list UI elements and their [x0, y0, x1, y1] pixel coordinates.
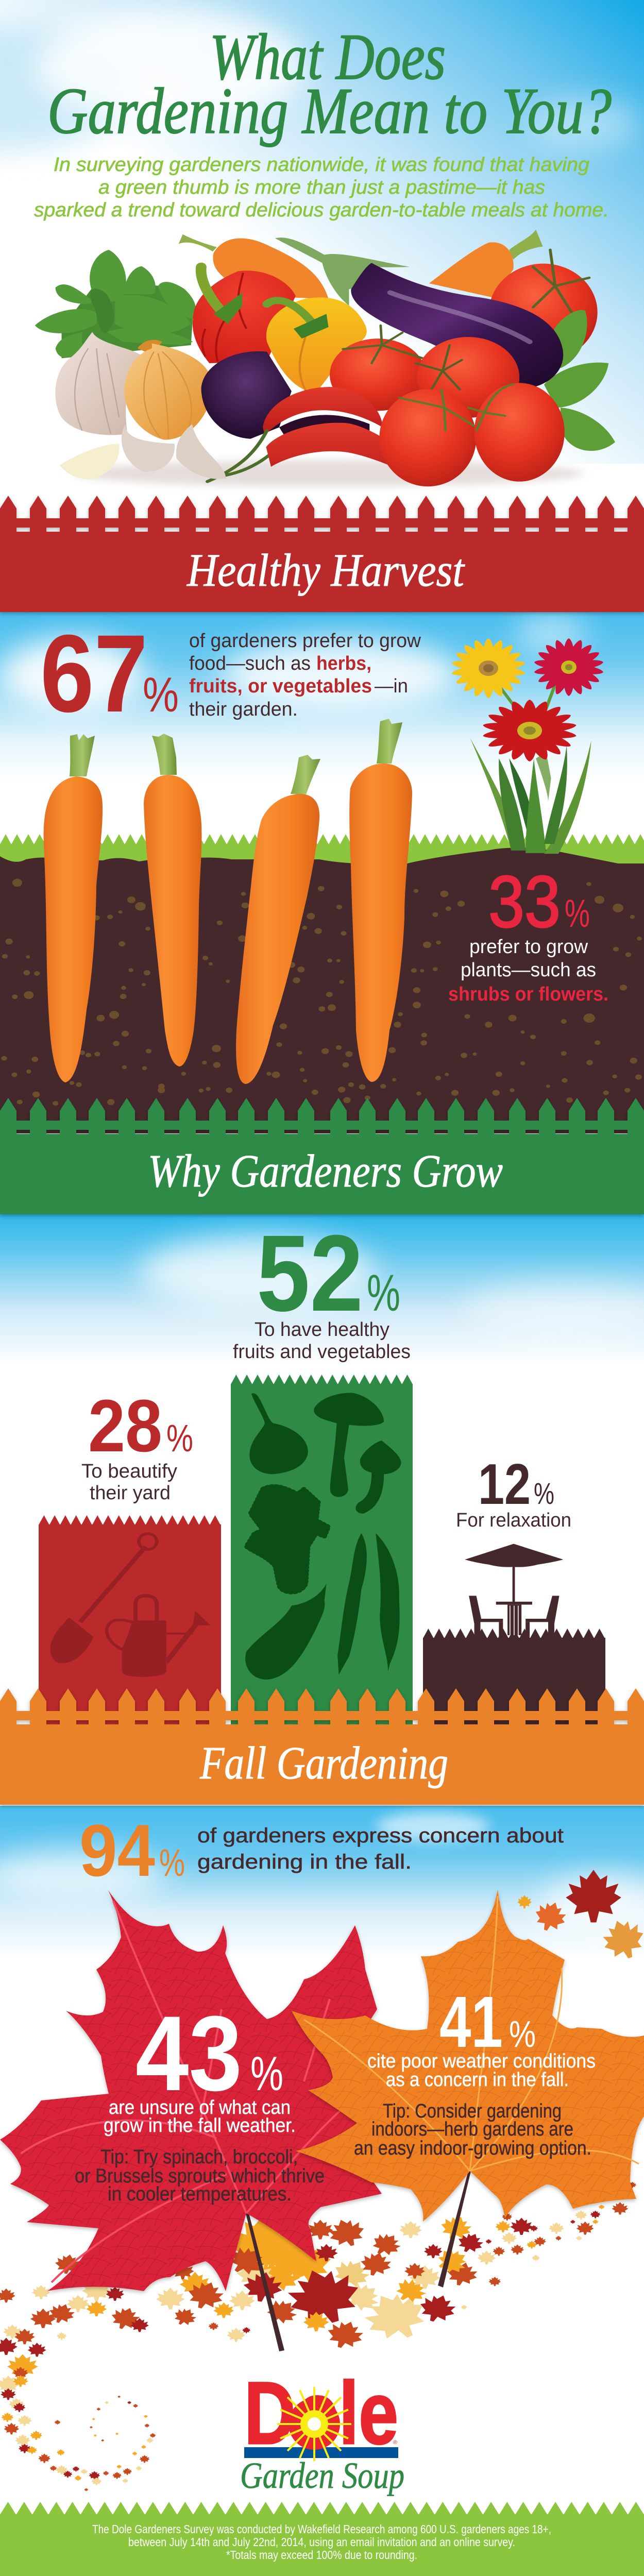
- icon: carrot 4: [349, 719, 412, 1082]
- stat: 67 percent: %: [143, 668, 179, 722]
- icon: garlic bulb: [55, 332, 144, 435]
- icon: tomato middle: [416, 337, 519, 418]
- stat: 43 percent: 43: [135, 1994, 242, 2113]
- tip text: indoor herbs: Tip: Consider gardening: [383, 2100, 562, 2122]
- icon: chili stems: [207, 431, 269, 482]
- stat: 12 percent: For relaxation: [456, 1510, 571, 1531]
- stat: 41 percent: [354, 1981, 596, 2159]
- icon: carrot 1: [44, 734, 103, 1082]
- sky: fall gardening: [0, 1806, 644, 1976]
- grass strip: [0, 834, 644, 870]
- stat text: food: herbs,: [316, 653, 371, 674]
- stat: 41 percent: %: [509, 2014, 536, 2055]
- leaf stem: red leaf: [245, 2211, 284, 2351]
- icon: carrot 3: [236, 755, 320, 1084]
- icon: left carrot: [179, 234, 329, 299]
- stat text: food: food—such as: [189, 653, 311, 674]
- icon: tomato front left: [379, 389, 477, 486]
- stat: 52 percent: 52: [257, 1212, 363, 1334]
- tip text: cool weather crops: [75, 2146, 325, 2205]
- stat text: plants: [448, 936, 608, 1005]
- stat: 52 percent: To have healthy: [255, 1319, 389, 1341]
- footer text: survey methodology: *Totals may exceed 100% due to rounding.: [226, 2548, 417, 2562]
- large orange maple leaf: [292, 1889, 644, 2287]
- stat text: food: [189, 630, 421, 720]
- icon: small eggplant: [201, 351, 292, 439]
- fence: red band: [0, 496, 644, 612]
- heading: why gardeners grow: Why Gardeners Grow: [148, 1146, 503, 1197]
- intro text: In surveying gardeners nationwide, it was found that having: [54, 154, 589, 176]
- icon: red chili bottom: [266, 423, 438, 484]
- heading: fall gardening: Fall Gardening: [199, 1738, 448, 1789]
- stat: 67 percent: 67: [40, 612, 148, 735]
- footer: [0, 2502, 644, 2576]
- fence: orange band: [0, 1688, 644, 1805]
- leaf texture and veins: orange: [292, 1889, 644, 2222]
- icon: tomato left: [330, 326, 426, 411]
- stat: 12 percent: %: [534, 1477, 554, 1511]
- sky: healthy harvest: [0, 612, 644, 849]
- silhouettes: garlic, mushrooms, lettuce, eggplant, beans: [245, 1393, 401, 1680]
- icon: red chili top: [263, 387, 383, 435]
- stat text: food: fruits, or vegetables: [189, 675, 372, 697]
- flower: yellow: [451, 638, 526, 698]
- icon: tomato front right: [468, 383, 565, 482]
- leaf body: orange: [292, 1889, 644, 2222]
- stat text: plants: plants—such as: [461, 959, 596, 981]
- tip text: indoor herbs: [354, 2100, 591, 2159]
- stat: 28 percent: their yard: [90, 1482, 171, 1504]
- stat text: weather: [367, 2050, 596, 2091]
- stat text: weather: as a concern in the fall.: [386, 2069, 569, 2091]
- stat: 41 percent: 41: [439, 1981, 503, 2062]
- soil speckles: [1, 879, 642, 1106]
- stat: 94 percent: %: [159, 1841, 185, 1884]
- leaf body: red: [0, 1890, 382, 2291]
- stat: 94 percent: gardening in the fall.: [197, 1851, 412, 1873]
- dark gap between chilies: [279, 415, 369, 440]
- tip text: cool weather crops: Tip: Try spinach, broccoli,: [100, 2146, 298, 2168]
- tip text: cool weather crops: or Brussels sprouts which thrive: [75, 2165, 325, 2187]
- logo: Dole: Dole: [244, 2364, 398, 2463]
- illustration: flowers: [451, 638, 604, 854]
- intro text: sparked a trend toward delicious garden-to-table meals at home.: [34, 199, 609, 221]
- icon: right carrot: [429, 229, 543, 297]
- icon: large eggplant: [275, 238, 563, 388]
- stat: 43 percent: %: [250, 2046, 283, 2100]
- title: [47, 21, 612, 147]
- title: What Does: [210, 21, 446, 93]
- flower stems and leaves: [470, 681, 591, 854]
- falling leaves: top right: [517, 1870, 644, 1965]
- footer text: survey methodology: between July 14th and July 22nd, 2014, using an email invitation and an online survey.: [128, 2535, 515, 2549]
- intro text: [34, 154, 609, 221]
- stat text: food: of gardeners prefer to grow: [189, 630, 421, 652]
- icon: left basil: [35, 250, 196, 358]
- bar: 28 percent beautify: [39, 1515, 221, 1725]
- stat: 12 percent: [456, 1452, 571, 1531]
- sky: header: [0, 0, 644, 464]
- tip text: indoor herbs: indoors—herb gardens are: [371, 2119, 573, 2140]
- bar: 52 percent fruits and vegetables: [231, 1375, 413, 1725]
- stat: 28 percent: To beautify: [81, 1461, 177, 1482]
- stat: 94 percent: 94: [79, 1810, 155, 1892]
- stat text: plants: prefer to grow: [469, 936, 588, 958]
- stat text: unsure: [104, 2097, 296, 2137]
- stat: 28 percent: 28: [88, 1384, 162, 1467]
- footer text: survey methodology: [92, 2522, 551, 2562]
- icon: right basil leaves: [544, 310, 615, 451]
- logo subtitle: garden soup: Garden Soup: [240, 2455, 404, 2496]
- icon: garlic cloves: [60, 424, 226, 480]
- icon: carrot 2: [144, 734, 201, 1066]
- stat: 52 percent: [233, 1212, 411, 1363]
- large red maple leaf: [0, 1890, 382, 2351]
- soil: [0, 848, 644, 1133]
- stat: 12 percent: 12: [478, 1452, 531, 1516]
- stat text: weather: cite poor weather conditions: [367, 2050, 596, 2072]
- leaf texture and veins: red: [0, 1890, 382, 2291]
- fence: green band: [0, 1098, 644, 1214]
- stat: 67 percent: [40, 612, 421, 735]
- leaf swirl: [0, 2182, 636, 2491]
- leaf stem: orange leaf: [438, 2171, 471, 2287]
- stat: 28 percent: [81, 1384, 193, 1504]
- logo: Dole: ®: [393, 2439, 397, 2446]
- stat text: unsure: are unsure of what can: [109, 2097, 291, 2119]
- stat: 33 percent: 33: [488, 861, 561, 943]
- sky: why gardeners grow: [0, 1214, 644, 1389]
- stat: 33 percent: [448, 861, 608, 1005]
- stat text: food: their garden.: [189, 699, 298, 720]
- icon: onion: [124, 340, 213, 440]
- stat: 94 percent: of gardeners express concern about: [197, 1824, 564, 1847]
- tip text: cool weather crops: in cooler temperatures.: [108, 2183, 292, 2205]
- footer text: survey methodology: The Dole Gardeners Survey was conducted by Wakefield Research among 600 U.S. gardeners ages 18+,: [92, 2522, 551, 2536]
- illustration: carrots: [44, 719, 412, 1084]
- stat: 94 percent: [79, 1810, 564, 1892]
- icon: yellow pepper: [266, 297, 367, 393]
- bar: 12 percent relaxation: [423, 1544, 605, 1725]
- silhouette: patio table and umbrella: [465, 1544, 563, 1642]
- stat: 52 percent: fruits and vegetables: [233, 1341, 411, 1363]
- stat: 43 percent: [75, 1994, 325, 2205]
- tip text: indoor herbs: an easy indoor-growing option.: [354, 2138, 591, 2159]
- icon: back tomato: [489, 250, 598, 361]
- stat text: unsure: grow in the fall weather.: [104, 2115, 296, 2137]
- flower: red: [482, 700, 578, 761]
- icon: sun: [277, 2387, 351, 2461]
- silhouettes: shovel and watering can: [50, 1534, 211, 1677]
- intro text: a green thumb is more than just a pastime—it has: [98, 177, 545, 198]
- icon: red pepper: [193, 267, 296, 363]
- stat: 33 percent: %: [565, 892, 590, 936]
- illustration: vegetable pile: [35, 229, 615, 486]
- stat text: food: —in: [375, 675, 408, 697]
- stat text: plants: shrubs or flowers.: [448, 984, 608, 1005]
- stat: 52 percent: %: [367, 1264, 400, 1322]
- flower: crimson: [533, 638, 604, 696]
- heading: healthy harvest: Healthy Harvest: [187, 545, 465, 596]
- stat: 28 percent: %: [166, 1417, 193, 1460]
